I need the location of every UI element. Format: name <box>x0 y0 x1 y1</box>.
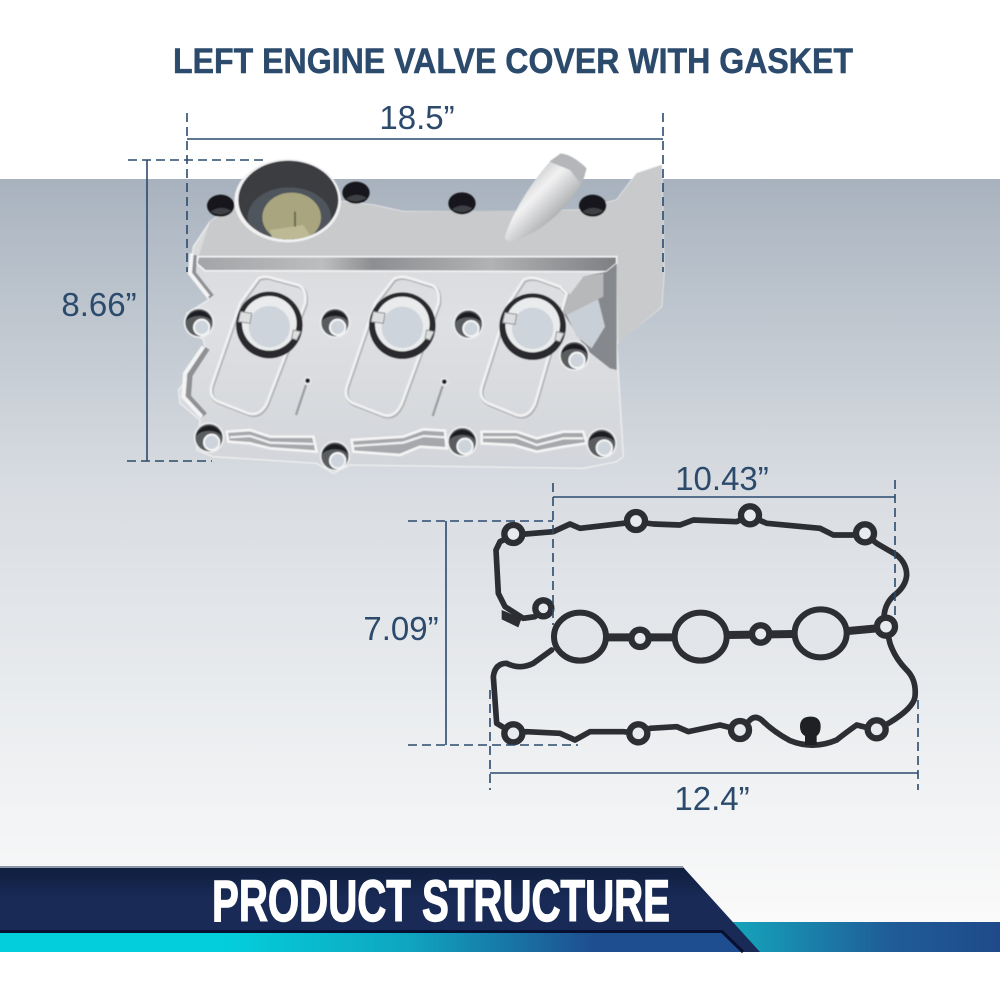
dimension 18.5 inch <box>187 99 663 272</box>
dimension 10.43 inch <box>553 460 895 625</box>
dimension 7.09 inch <box>363 521 578 745</box>
gasket <box>493 506 915 745</box>
upper flange surface <box>198 165 664 343</box>
port 3 <box>499 293 566 360</box>
slot outlines <box>212 278 568 417</box>
dimension 7.09 inch: 7.09” <box>363 610 439 647</box>
port 2 <box>369 292 436 359</box>
product structure banner <box>0 866 1000 952</box>
gasket valve rings <box>554 609 847 661</box>
banner divider <box>0 932 743 952</box>
valve cover photo <box>178 153 664 473</box>
cover body silhouette <box>178 165 664 473</box>
top mounting holes <box>207 182 606 217</box>
gasket bolt rings <box>504 506 895 742</box>
pins <box>296 376 449 416</box>
dimension 8.66 inch: 8.66” <box>61 286 137 323</box>
breather tube <box>505 153 587 242</box>
navy banner shape <box>0 867 760 952</box>
bottom rail <box>227 429 587 455</box>
banner top highlight <box>0 866 683 868</box>
dimension 8.66 inch <box>61 160 265 461</box>
gasket bridge <box>607 628 877 637</box>
right rib with opening <box>558 263 617 370</box>
banner heading: PRODUCT STRUCTURE <box>212 869 670 934</box>
left edge ribbing <box>183 253 212 417</box>
oil filler cap <box>234 159 341 247</box>
dimension 10.43 inch: 10.43” <box>675 460 769 497</box>
gray gradient backdrop <box>0 179 1000 924</box>
title: LEFT ENGINE VALVE COVER WITH GASKET <box>173 42 853 81</box>
right ribbon <box>725 922 1000 952</box>
gasket outer seal <box>493 516 915 745</box>
bolt bosses <box>184 307 617 471</box>
gasket plug <box>800 717 821 745</box>
dimension 12.4 inch <box>490 690 918 817</box>
shelf edge <box>197 257 617 272</box>
dimension 18.5 inch: 18.5” <box>379 99 455 136</box>
gasket tab <box>502 610 522 627</box>
port 1 <box>236 292 303 358</box>
teal ribbon <box>0 933 742 952</box>
dimension 12.4 inch: 12.4” <box>674 780 750 817</box>
